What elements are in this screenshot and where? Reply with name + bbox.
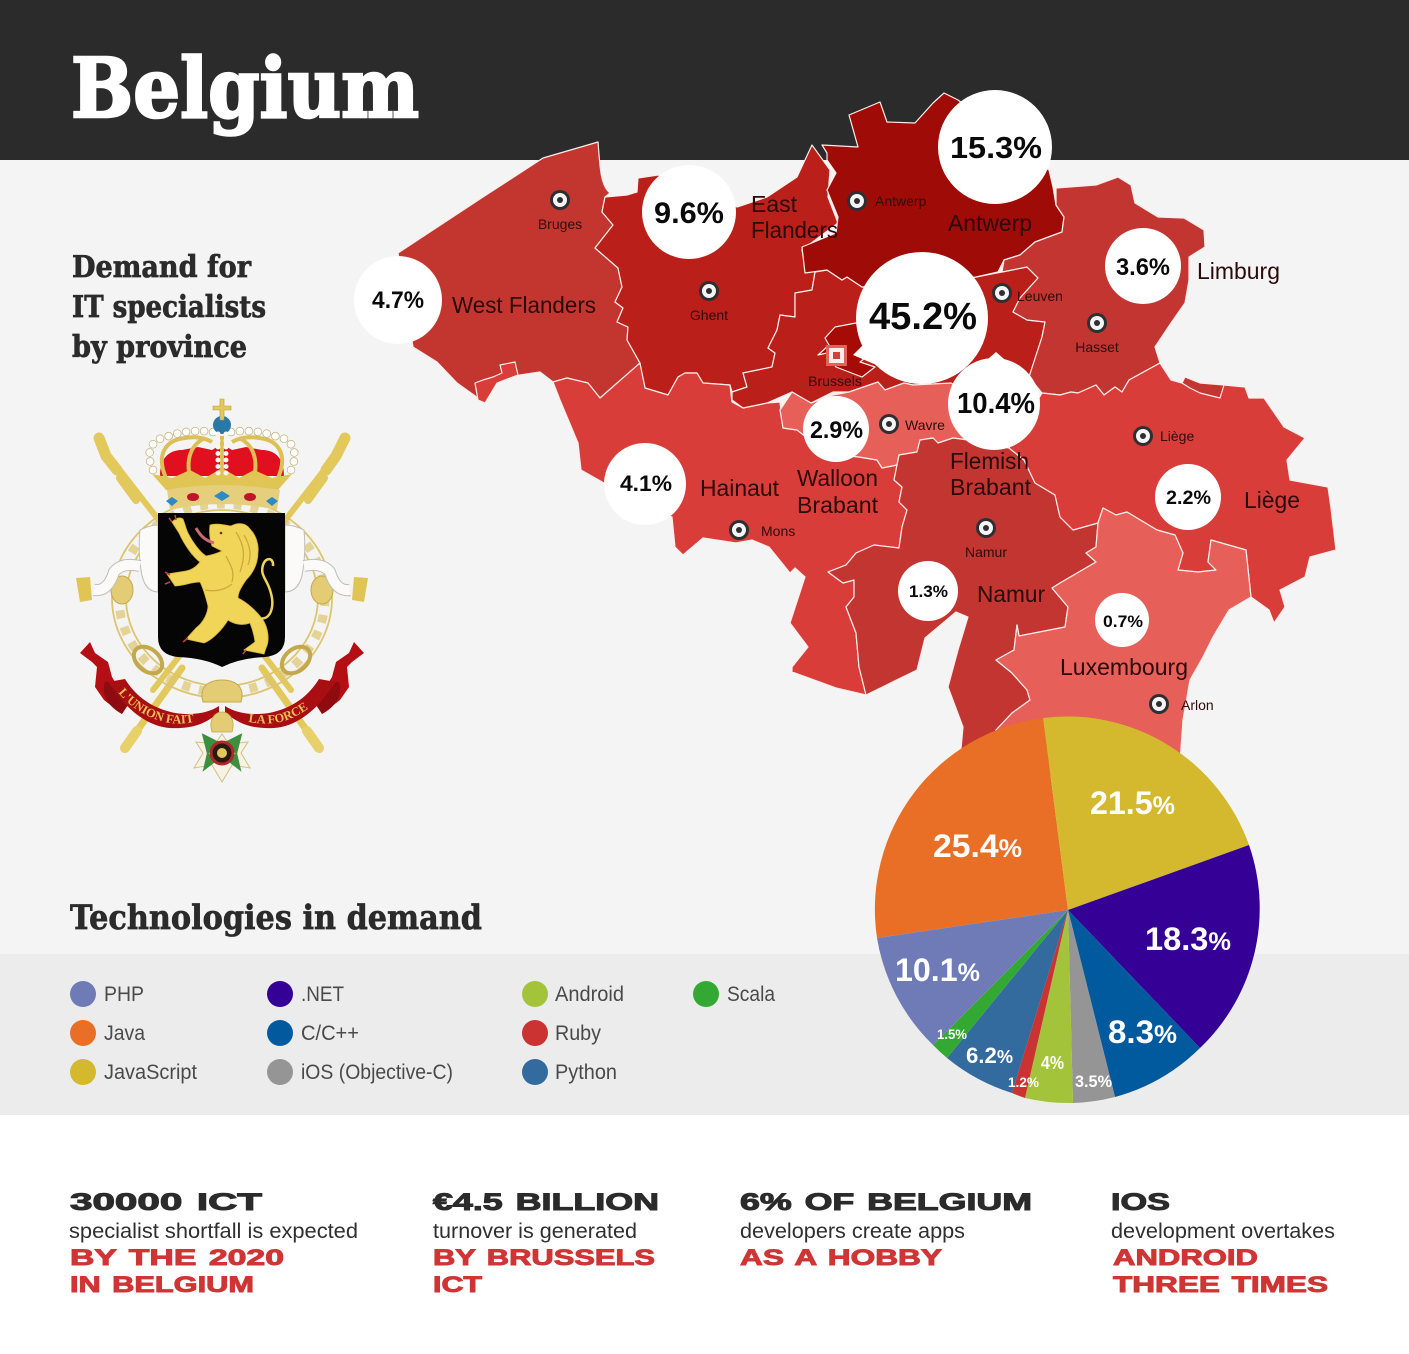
marker: Brussels capital <box>826 345 847 366</box>
province labels: Namur <box>977 581 1045 607</box>
slice: JavaScript 21.5% <box>1043 716 1249 910</box>
bubble: Walloon Brabant 2.9%: 2.9% <box>810 417 863 444</box>
white drapes and tassels <box>76 525 368 602</box>
province labels: Brabant <box>797 492 879 518</box>
crossed scepters <box>99 438 345 749</box>
map of Belgium <box>398 93 1336 790</box>
legend: .NET: .NET <box>301 983 344 1006</box>
shield <box>158 513 285 667</box>
legend: Python <box>522 1059 617 1085</box>
legend: Ruby: Ruby <box>555 1022 601 1045</box>
motto ribbon <box>80 642 364 728</box>
slice: Ruby 1.2% <box>1012 910 1068 1098</box>
heading: demand by province: IT specialists <box>72 290 266 325</box>
heading: technologies: Technologies in demand <box>70 898 482 938</box>
province: Antwerp <box>802 93 1064 287</box>
city labels: Liège <box>1160 428 1194 444</box>
province: Luxembourg <box>990 508 1251 790</box>
bubble: Brussels 45.2% <box>853 252 988 384</box>
chain collar <box>112 498 332 698</box>
stat: hobby: developers create apps <box>740 1220 965 1243</box>
bubble: Liège 2.2%: 2.2% <box>1166 488 1211 509</box>
stat: hobby <box>740 1189 1032 1270</box>
Hainaut enclave <box>475 362 518 403</box>
marker: Antwerp <box>847 191 867 211</box>
percentage bubbles <box>354 90 1221 647</box>
marker: Liège <box>1133 426 1153 446</box>
city markers <box>550 190 1169 714</box>
pie labels: 8.3% <box>1108 1014 1177 1050</box>
province: Limburg <box>1002 177 1205 395</box>
bubble: Luxembourg 0.7%: 0.7% <box>1103 612 1143 631</box>
motto text left: L'UNION FAIT <box>118 687 194 724</box>
slice: .NET 18.3% <box>1068 845 1260 1048</box>
footer background <box>0 1115 1409 1354</box>
legend: C/C++ <box>267 1020 359 1046</box>
province labels: Brabant <box>950 474 1032 500</box>
bubble: West Flanders 4.7%: 4.7% <box>372 287 424 314</box>
header band <box>0 0 1409 160</box>
bubble: East Flanders 9.6% <box>642 165 736 259</box>
heading: demand by province: by province <box>72 330 247 365</box>
bubble: Hainaut 4.1%: 4.1% <box>620 471 672 496</box>
Limburg enclave <box>1182 377 1224 398</box>
province labels: Flanders <box>751 217 838 243</box>
legend: Scala: Scala <box>727 983 775 1006</box>
city labels: Mons <box>761 523 795 539</box>
legend: iOS <box>267 1059 453 1085</box>
province labels: Antwerp <box>948 210 1032 236</box>
stat: hobby: AS A HOBBY <box>740 1245 942 1270</box>
bubble: Hainaut 4.1% <box>604 443 686 525</box>
slice: Android 4% <box>1025 910 1073 1103</box>
legend: Java: Java <box>104 1022 145 1045</box>
marker: Leuven <box>992 283 1012 303</box>
bubble: Antwerp 15.3% <box>938 90 1052 204</box>
pie labels <box>895 785 1231 1091</box>
bubble: Brussels 45.2%: 45.2% <box>869 296 977 338</box>
pie labels: 21.5% <box>1090 785 1175 821</box>
legend: Java <box>70 1020 145 1046</box>
stat: turnover: ICT <box>433 1272 483 1297</box>
bubble: West Flanders 4.7% <box>354 256 442 344</box>
heading: demand by province <box>72 250 266 365</box>
marker: Arlon <box>1149 694 1169 714</box>
legend: Python: Python <box>555 1061 617 1084</box>
marker: Mons <box>729 520 749 540</box>
bubble: Luxembourg 0.7% <box>1095 593 1149 647</box>
province: East Flanders <box>595 145 838 395</box>
stat: turnover <box>433 1189 659 1297</box>
pie chart <box>875 716 1260 1103</box>
legend: Android: Android <box>555 983 624 1006</box>
pie labels: 1.2% <box>1008 1074 1040 1090</box>
city labels: Bruges <box>538 216 582 232</box>
stat: shortfall <box>69 1189 358 1297</box>
province labels: Walloon <box>797 465 878 491</box>
province: West Flanders <box>398 142 640 403</box>
legend: Scala <box>693 981 775 1007</box>
pie labels: 3.5% <box>1075 1072 1112 1091</box>
stat: shortfall: 30000 ICT <box>70 1189 263 1216</box>
province labels: Liège <box>1244 487 1300 513</box>
city labels <box>538 193 1214 713</box>
medal <box>194 712 250 782</box>
legend: PHP <box>70 981 144 1007</box>
stat: iOS <box>1111 1189 1335 1297</box>
province labels: Limburg <box>1197 258 1280 284</box>
slice: C/C++ 8.3% <box>1068 910 1200 1097</box>
stat: shortfall: specialist shortfall is expected <box>69 1220 358 1243</box>
city labels: Ghent <box>690 307 728 323</box>
province: Brussels <box>818 323 900 377</box>
bubble: Flemish Brabant 10.4%: 10.4% <box>957 388 1035 420</box>
legend: Ruby <box>522 1020 601 1046</box>
slice: Scala 1.5% <box>933 910 1068 1058</box>
province labels: West Flanders <box>452 292 596 318</box>
legend band <box>0 954 1409 1115</box>
marker: Ghent <box>699 281 719 301</box>
bubble: Limburg 3.6% <box>1105 228 1181 304</box>
title: Belgium <box>71 41 419 137</box>
stat: shortfall: BY THE 2020 <box>70 1245 284 1270</box>
stat: iOS: ANDROID <box>1113 1245 1258 1270</box>
legend: iOS: iOS (Objective-C) <box>301 1061 453 1084</box>
province: Flemish Brabant <box>732 267 1045 408</box>
province labels: Luxembourg <box>1060 654 1188 680</box>
city labels: Leuven <box>1017 288 1063 304</box>
marker: Hasset <box>1087 313 1107 333</box>
pie labels: 4% <box>1041 1053 1064 1073</box>
legend: PHP: PHP <box>104 983 144 1006</box>
province: Namur <box>828 438 1098 760</box>
legend: Android <box>522 981 624 1007</box>
collar crowns and knots <box>111 576 333 702</box>
stat: iOS: IOS <box>1111 1189 1170 1216</box>
marker: Bruges <box>550 190 570 210</box>
city labels: Arlon <box>1181 697 1214 713</box>
crown <box>149 399 295 510</box>
stat: hobby: 6% OF BELGIUM <box>740 1189 1032 1216</box>
heading: demand by province: Demand for <box>72 250 252 285</box>
stat: turnover: turnover is generated <box>433 1220 637 1243</box>
stat: turnover: BY BRUSSELS <box>433 1245 655 1270</box>
legend: JavaScript <box>70 1059 197 1085</box>
legend: .NET <box>267 981 344 1007</box>
province: Walloon Brabant <box>780 382 980 468</box>
pie labels: 18.3% <box>1145 921 1231 957</box>
province: Hainaut <box>553 363 907 695</box>
stat: iOS: THREE TIMES <box>1113 1272 1328 1297</box>
pie labels: 10.1% <box>895 952 980 988</box>
city labels: Hasset <box>1075 339 1119 355</box>
slice: Java 25.4% <box>875 718 1068 938</box>
city labels: Wavre <box>905 417 945 433</box>
coat of arms <box>76 398 368 783</box>
lion <box>165 515 273 654</box>
bubble: Liège 2.2% <box>1155 464 1221 530</box>
pie labels: 25.4% <box>933 828 1022 864</box>
province labels <box>452 191 1300 680</box>
slice: PHP 10.1% <box>877 910 1068 1045</box>
bubble: Limburg 3.6%: 3.6% <box>1116 254 1170 281</box>
bubble: Namur 1.3% <box>898 561 958 621</box>
bubble: Antwerp 15.3%: 15.3% <box>950 130 1042 165</box>
province labels: Hainaut <box>700 475 780 501</box>
pie labels: 1.5% <box>937 1026 968 1042</box>
stat: turnover: €4.5 BILLION <box>433 1189 659 1216</box>
marker: Namur <box>976 518 996 538</box>
city labels: Namur <box>965 544 1007 560</box>
city labels: Antwerp <box>875 193 927 209</box>
slice: Python 6.2% <box>947 910 1068 1093</box>
slice: iOS 3.5% <box>1068 910 1115 1103</box>
province labels: East <box>751 191 798 217</box>
stat: iOS: development overtakes <box>1111 1220 1335 1243</box>
bubble: Walloon Brabant 2.9% <box>803 396 869 462</box>
bubble: Namur 1.3%: 1.3% <box>909 582 948 601</box>
province labels: Flemish <box>950 448 1029 474</box>
motto text right: LA FORCE <box>248 702 308 724</box>
legend <box>70 981 775 1085</box>
bubble: Flemish Brabant 10.4% <box>948 352 1040 450</box>
stat: shortfall: IN BELGIUM <box>70 1272 254 1297</box>
marker: Wavre <box>879 414 899 434</box>
legend: C/C++: C/C++ <box>301 1022 359 1045</box>
province: Liège <box>1009 363 1336 623</box>
pie labels: 6.2% <box>966 1043 1013 1068</box>
legend: JavaScript: JavaScript <box>104 1061 197 1084</box>
bubble: East Flanders 9.6%: 9.6% <box>654 197 724 230</box>
city labels: Brussels <box>808 373 862 389</box>
